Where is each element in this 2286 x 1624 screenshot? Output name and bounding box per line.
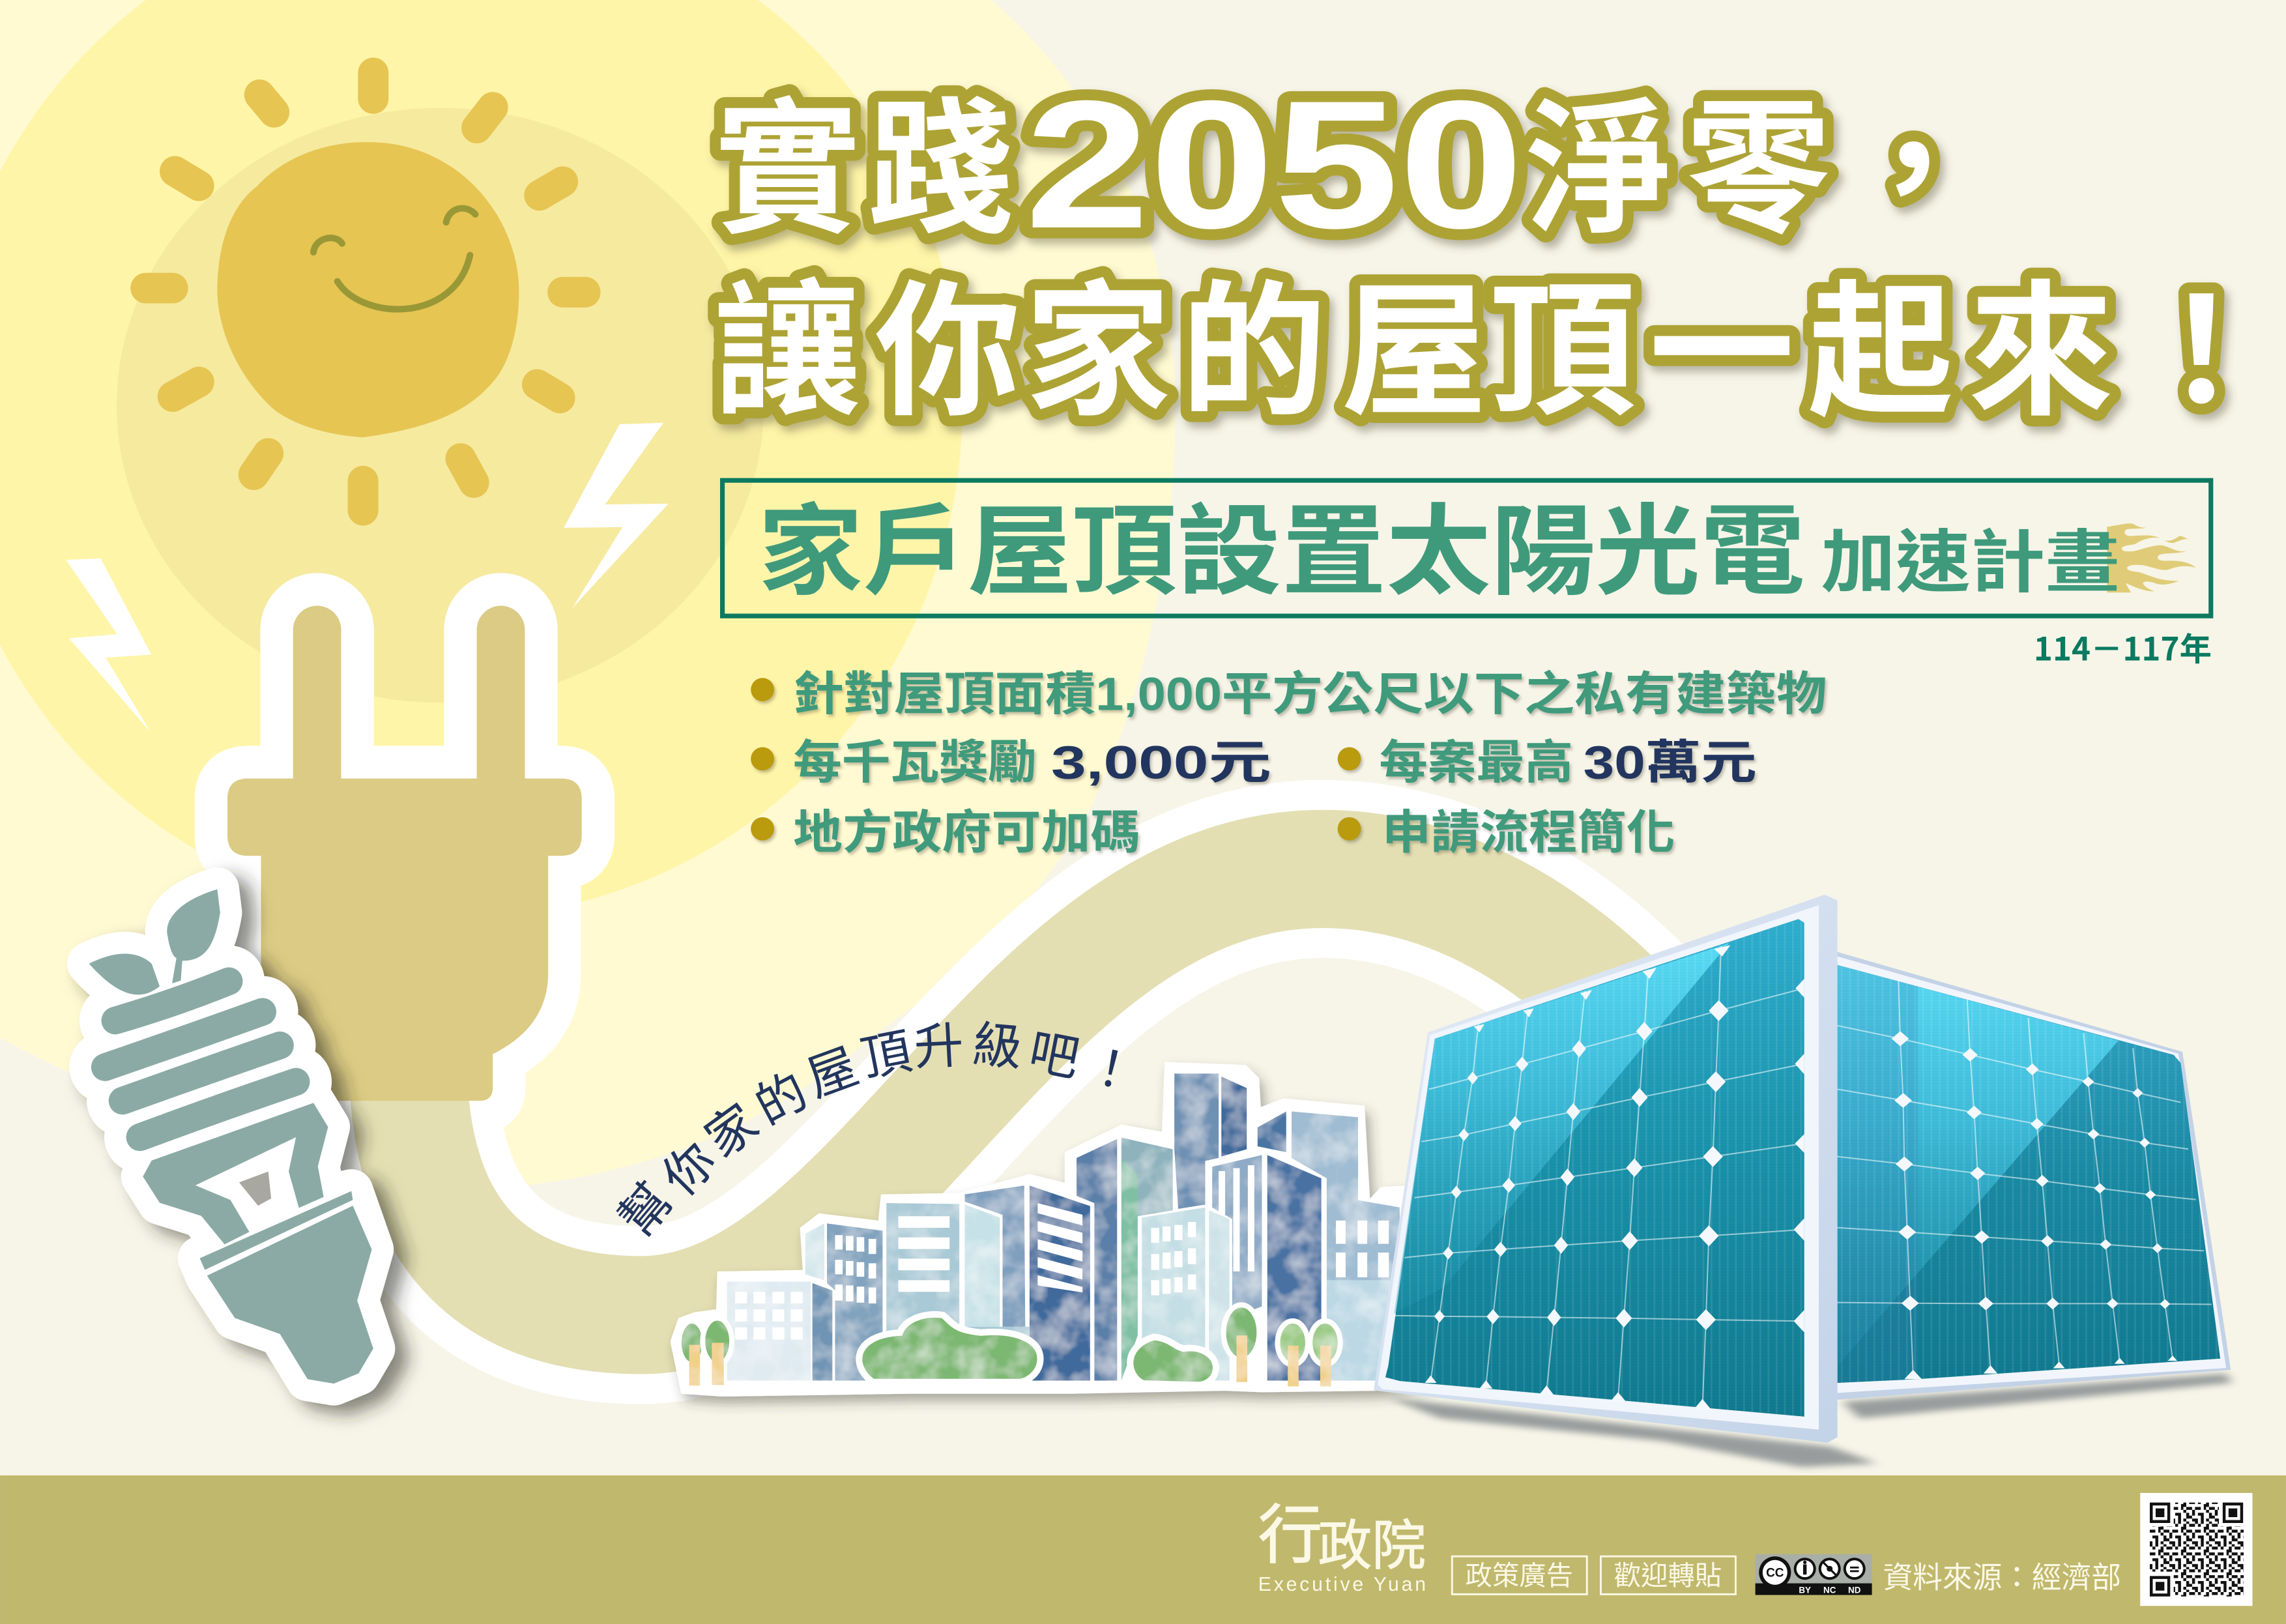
building: rear right <box>1292 1111 1400 1380</box>
title: line 1: ， <box>1840 89 1986 252</box>
power cable white edge <box>408 869 1706 1315</box>
logo: Executive Yuan <box>1258 1483 1426 1595</box>
title: line 2: 屋 <box>1341 270 1487 433</box>
watercolour buildings and plants <box>679 1073 1400 1386</box>
handwritten slogan: 頂 <box>857 1024 916 1088</box>
background glow: inner sun halo <box>117 108 764 703</box>
handwritten slogan: 升 <box>913 1018 965 1076</box>
handwritten slogan: 吧 <box>1024 1024 1084 1088</box>
sun body <box>217 142 519 437</box>
icon: lightning right <box>564 423 669 608</box>
handwritten slogan: 的 <box>747 1063 817 1135</box>
power cable <box>408 869 1706 1315</box>
icon: flame decoration <box>2107 523 2196 592</box>
logo: Executive Yuan: Executive Yuan <box>1258 1574 1426 1595</box>
icon: QR code <box>2140 1493 2252 1606</box>
bullet list text: 申請流程簡化 <box>1382 807 1675 859</box>
sun rays <box>146 73 585 510</box>
front solar panel <box>1374 895 1838 1443</box>
bullet list text: 30萬元 <box>1584 737 1757 789</box>
handwritten slogan <box>609 1017 1141 1247</box>
subtitle program text: 加速計畫 <box>1821 507 2120 606</box>
icon: creative commons badge <box>1756 1554 1872 1595</box>
building: central tower <box>1077 1139 1117 1380</box>
icon: lightning left <box>66 558 151 732</box>
back solar panel <box>1838 952 2231 1400</box>
trees <box>679 1305 1340 1365</box>
city white sticker silhouette <box>671 1062 1429 1397</box>
bulb hole <box>239 1172 271 1206</box>
sun face <box>313 209 475 309</box>
icon: creative commons badge: CC <box>1766 1567 1784 1580</box>
logo: Executive Yuan: 政院 <box>1318 1501 1426 1580</box>
title: line 1: 零 <box>1685 89 1831 252</box>
bullet list text: 地方政府可加碼 <box>793 807 1140 859</box>
icon: smiling sun <box>146 73 585 510</box>
handwritten slogan: 級 <box>970 1017 1024 1077</box>
building: low left <box>727 1282 811 1380</box>
handwritten slogan: 屋 <box>800 1039 865 1108</box>
big bush <box>859 1314 1041 1382</box>
bullet list text: 每案最高 <box>1379 737 1573 789</box>
footer band <box>0 1475 2286 1624</box>
handwritten slogan: 你 <box>652 1132 727 1206</box>
building: dark stripes <box>964 1185 1025 1327</box>
title: line 2 <box>714 270 2274 433</box>
bulb white outline <box>89 890 373 1384</box>
handwritten slogan: ！ <box>1081 1038 1141 1103</box>
title: line 2: 你 <box>875 270 1020 433</box>
building: mint front <box>1142 1208 1205 1380</box>
bullet list text: 3,000元 <box>1051 737 1271 789</box>
subtitle main text: 家戶屋頂設置太陽光電 <box>758 471 1805 615</box>
title: line 2: 讓 <box>714 270 860 433</box>
subtitle panel <box>723 471 2211 616</box>
bullet dots <box>751 678 1361 841</box>
bullet list text <box>793 669 1827 859</box>
title: line 2: 家 <box>1025 270 1171 433</box>
title: line 2: ！ <box>2128 270 2274 433</box>
back panel nodes <box>1892 1031 2177 1379</box>
title: line 2: 的 <box>1181 270 1327 433</box>
title: line 2: 頂 <box>1490 270 1636 433</box>
subtitle frame <box>723 480 2211 616</box>
title: line 2: 起 <box>1808 270 1954 433</box>
logo: Executive Yuan: 行 <box>1258 1483 1322 1576</box>
title: line 2: 來 <box>1968 270 2114 433</box>
program years: 114－117年 <box>2034 624 2212 670</box>
front panel grid <box>1394 946 1804 1407</box>
title: line 1: 實 <box>714 89 860 252</box>
icon: creative commons badge: BY <box>1799 1585 1811 1595</box>
title: line 1: 2050 <box>1025 63 1524 267</box>
icon: energy-saving bulb <box>89 890 373 1384</box>
bullet list text: 針對屋頂面積1,000平方公尺以下之私有建築物 <box>793 669 1827 721</box>
title: line 1 <box>714 63 1986 267</box>
title: line 1: 踐 <box>867 89 1013 252</box>
back panel grid <box>1838 981 2212 1374</box>
building: white-bar block <box>886 1203 959 1327</box>
source credit: 資料來源：經濟部 <box>1883 1554 2121 1597</box>
handwritten slogan: 家 <box>695 1094 768 1168</box>
handwritten slogan: 幫 <box>609 1173 683 1247</box>
panel ground shadows <box>1388 1374 2232 1467</box>
front panel nodes <box>1425 945 1804 1410</box>
title: line 1: 淨 <box>1526 89 1672 252</box>
bulb colour fill <box>89 890 373 1384</box>
background glow: outer pale yellow shape <box>0 0 1175 1185</box>
icon: creative commons badge: NC <box>1823 1585 1836 1595</box>
solar panels <box>1374 895 2232 1467</box>
title: line 2: 一 <box>1649 270 1795 433</box>
building: second left <box>805 1223 824 1280</box>
city illustration <box>671 1062 1429 1397</box>
bullet list text: 每千瓦獎勵 <box>793 737 1037 789</box>
icon: plug <box>227 606 582 1101</box>
icon: creative commons badge: ND <box>1848 1585 1861 1595</box>
small bush <box>1130 1337 1216 1385</box>
building: tallest <box>1174 1073 1219 1209</box>
tag: policy advertisement: 政策廣告 <box>1465 1554 1573 1593</box>
building: striped tower <box>1212 1155 1262 1318</box>
plug white outline <box>227 606 582 1101</box>
background glow: middle yellow circle <box>0 0 962 918</box>
tag: welcome to share: 歡迎轉貼 <box>1614 1554 1722 1593</box>
